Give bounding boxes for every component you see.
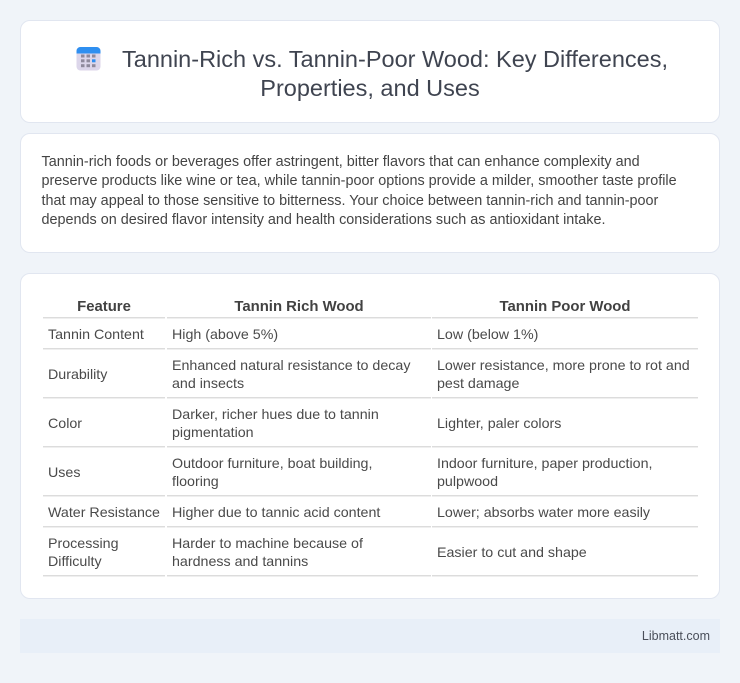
row: uses — [48, 456, 652, 490]
row: durability — [48, 358, 690, 392]
row: tannin content: Tannin Content — [48, 327, 144, 343]
row: water resistance: Water Resistance — [48, 505, 160, 521]
row: water resistance — [48, 505, 650, 521]
table header: Feature — [77, 299, 131, 315]
icon: calendar — [76, 47, 100, 70]
row: processing difficulty — [48, 536, 587, 570]
row: processing difficulty: Easier to cut and shape — [437, 545, 587, 561]
intro text — [42, 154, 677, 228]
header card — [20, 20, 720, 123]
intro text: Tannin-rich foods or beverages offer astringent, bitter flavors that can enhance complexity and — [42, 154, 640, 170]
row: uses: Uses — [48, 465, 80, 481]
intro text: that may appeal to those sensitive to bitterness. Your choice between tannin-rich and tannin-poor — [42, 193, 658, 209]
row: processing difficulty: Harder to machine because of — [172, 536, 363, 552]
row: processing difficulty: Difficulty — [48, 554, 102, 570]
title — [122, 46, 668, 101]
row: uses: pulpwood — [437, 474, 498, 490]
table header: Tannin Poor Wood — [500, 299, 630, 315]
title: Tannin-Rich vs. Tannin-Poor Wood: Key Differences, — [122, 46, 668, 72]
row: durability: pest damage — [437, 376, 519, 392]
title: Properties, and Uses — [260, 74, 480, 100]
row: tannin content: High (above 5%) — [172, 327, 278, 343]
row: processing difficulty: hardness and tannins — [172, 554, 308, 570]
row: tannin content — [48, 327, 538, 343]
row: durability: Lower resistance, more prone to rot and — [437, 358, 690, 374]
panel: comparison table — [20, 273, 720, 599]
row: tannin content: Low (below 1%) — [437, 327, 538, 343]
row: uses: flooring — [172, 474, 219, 490]
row: color: Lighter, paler colors — [437, 416, 561, 432]
row: durability: Enhanced natural resistance to decay — [172, 358, 410, 374]
panel: introduction — [20, 133, 720, 253]
row: color: Color — [48, 416, 82, 432]
row: durability: and insects — [172, 376, 244, 392]
row: color: Darker, richer hues due to tannin — [172, 407, 379, 423]
row: uses: Outdoor furniture, boat building, — [172, 456, 372, 472]
row: water resistance: Lower; absorbs water more easily — [437, 505, 650, 521]
row: uses: Indoor furniture, paper production, — [437, 456, 652, 472]
row: water resistance: Higher due to tannic acid content — [172, 505, 380, 521]
intro text: depends on desired flavor intensity and health considerations such as antioxidant intake. — [42, 212, 606, 228]
row: color — [48, 407, 561, 441]
row: processing difficulty: Processing — [48, 536, 118, 552]
table header: Tannin Rich Wood — [234, 299, 364, 315]
footer text: source: Libmatt.com — [642, 629, 710, 643]
row: durability: Durability — [48, 367, 107, 383]
row: color: pigmentation — [172, 425, 254, 441]
footer bar — [20, 619, 720, 653]
table header — [77, 299, 630, 315]
intro text: preserve products like wine or tea, while tannin-poor options provide a milder, smoother taste profile — [42, 173, 677, 189]
